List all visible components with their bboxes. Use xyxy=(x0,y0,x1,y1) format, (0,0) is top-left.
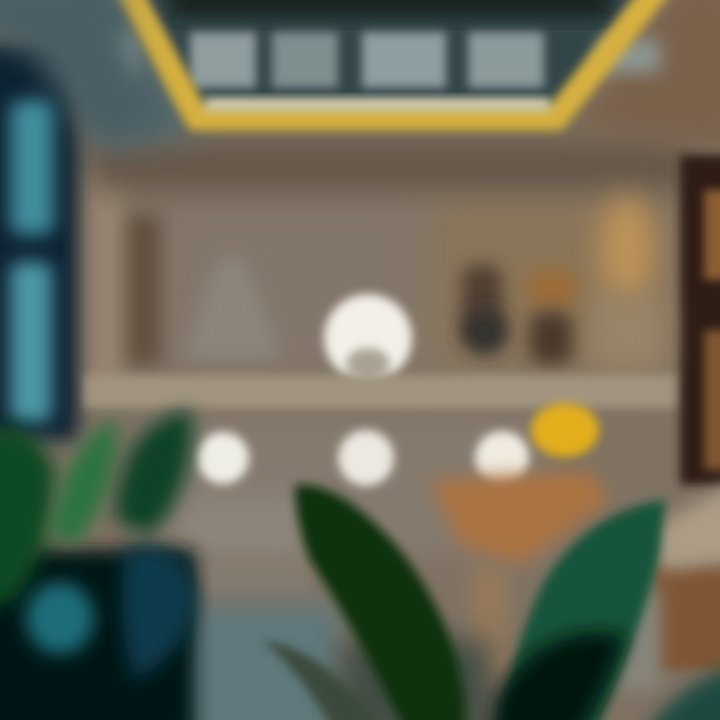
shelf xyxy=(85,375,675,408)
ceiling xyxy=(60,0,720,190)
plant centre leaf xyxy=(262,485,465,720)
window pane upper xyxy=(10,100,54,235)
window column xyxy=(0,0,160,440)
skylight xyxy=(45,0,660,125)
right wooden column xyxy=(680,155,720,485)
plant right leaf xyxy=(490,500,720,720)
furniture bottom right xyxy=(610,480,720,690)
glowing orb right xyxy=(475,431,529,485)
plant left xyxy=(0,410,195,720)
skylight yellow frame xyxy=(125,0,660,118)
glowing orb centre xyxy=(338,430,394,486)
wall niche right xyxy=(590,295,665,370)
yellow ornament xyxy=(531,403,599,457)
grey arch decoration xyxy=(185,255,282,360)
window pane lower xyxy=(10,262,52,422)
lower wall shadow xyxy=(180,495,310,560)
shelf objects xyxy=(462,265,578,364)
floor xyxy=(150,555,490,720)
wall light glow xyxy=(599,195,655,305)
glowing orb left xyxy=(197,432,249,484)
teal pot xyxy=(122,547,195,680)
white dome ornament xyxy=(324,294,412,382)
wooden table xyxy=(430,470,610,675)
